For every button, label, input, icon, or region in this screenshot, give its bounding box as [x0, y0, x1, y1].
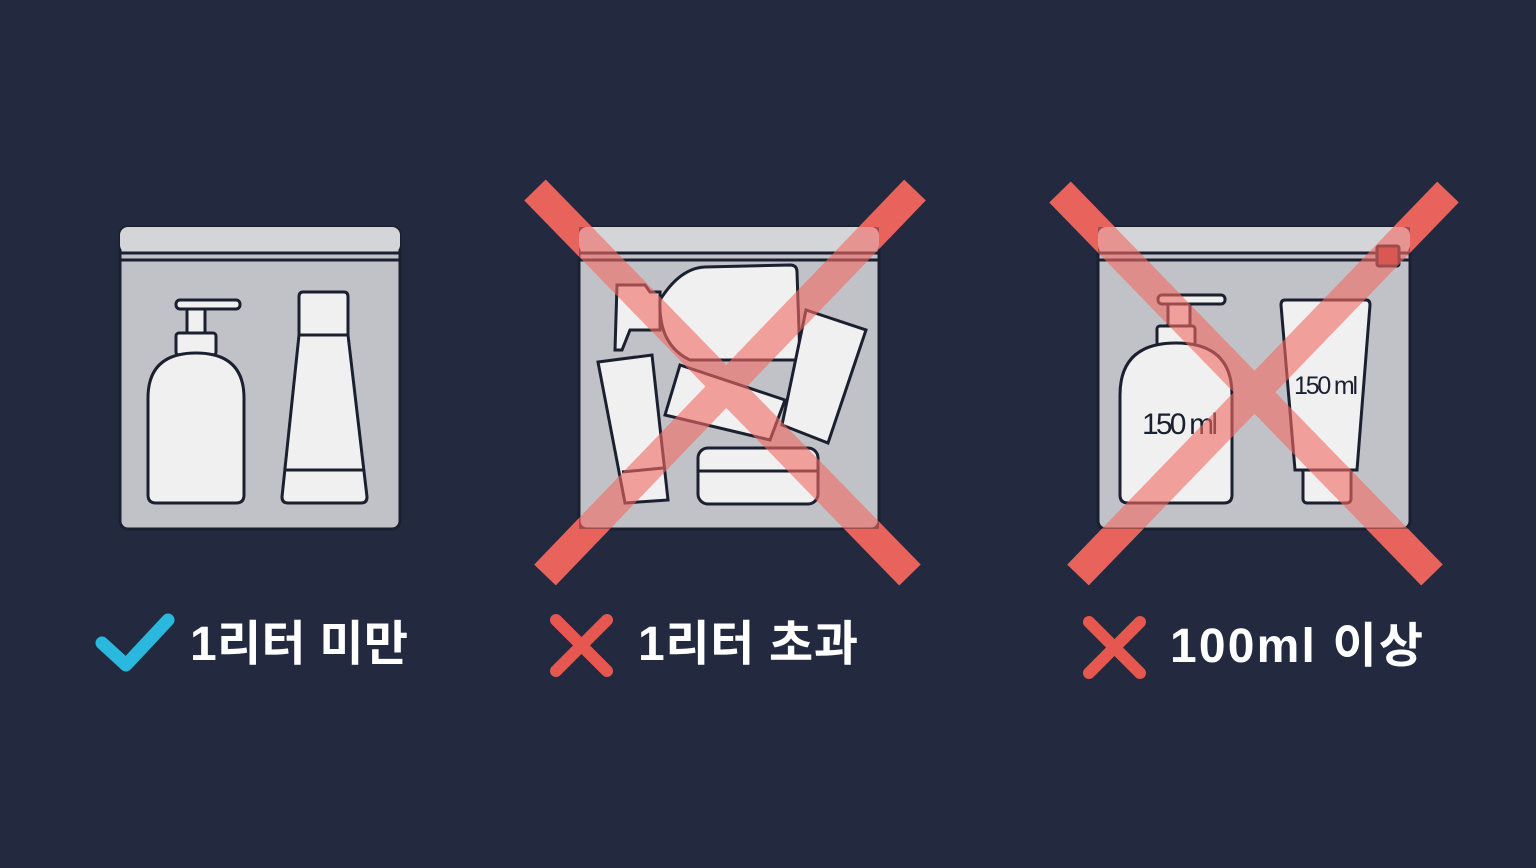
icon: bottle 150ml: [1120, 295, 1232, 503]
label: over 1 liter: 1리터 초과: [638, 618, 858, 671]
icon: check mark: [102, 620, 168, 665]
icon: tubes: [782, 310, 866, 443]
icon: tube: [282, 292, 367, 503]
icon: pump bottle: [148, 300, 244, 503]
icon: red x: [1089, 622, 1140, 673]
icon: tube 150ml: [1281, 300, 1370, 503]
panel: bag over 1 liter: [535, 190, 915, 575]
icon: red x: [556, 620, 607, 671]
icon: spray bottle: [615, 285, 660, 350]
panel: bag 100ml or more: 150 ml: [1142, 408, 1218, 441]
panel: bag 100ml or more: 150 ml: [1294, 372, 1358, 400]
icon: big red cross: [535, 190, 915, 575]
label: under 1 liter: 1리터 미만: [190, 618, 408, 671]
panel: bag 100ml or more: [1060, 192, 1448, 575]
icon: big red cross: [1060, 192, 1448, 575]
panel: bag under 1 liter: [120, 227, 400, 529]
label: 100ml or more: 100ml 이상: [1170, 620, 1423, 673]
icon: box: [665, 365, 785, 440]
